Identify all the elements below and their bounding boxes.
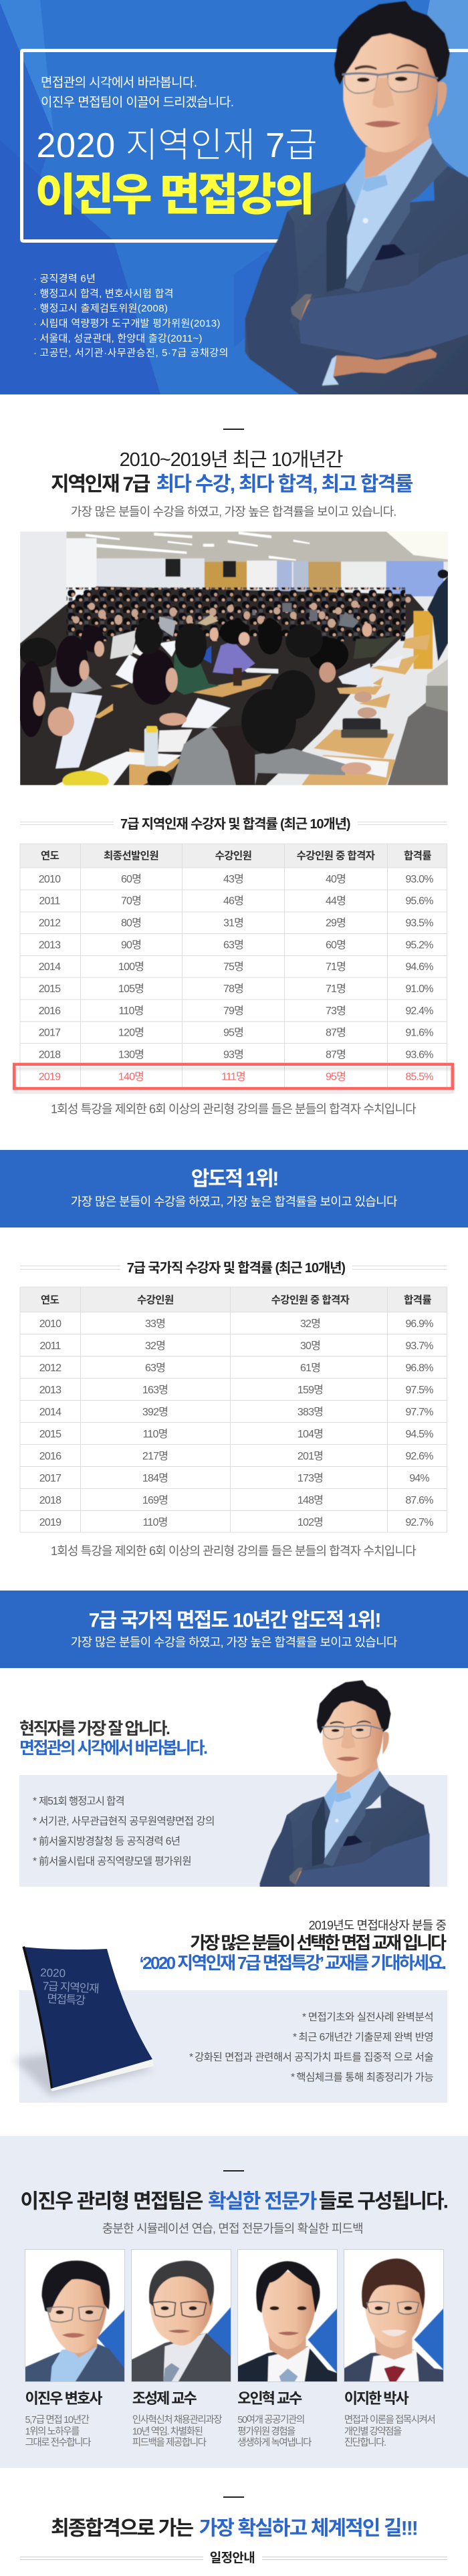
banner: overwhelming first place <box>0 1150 468 1227</box>
hero career list: · <box>33 333 37 344</box>
hero career list: 행정고시 출제검토위원(2008) <box>39 303 168 314</box>
table: national applicants and pass rate: 159명 <box>298 1384 323 1396</box>
card: 오인혁 교수: 평가위원 경험을 <box>237 2426 296 2437</box>
profile bullets: * <box>33 1816 37 1827</box>
heading: regional table: 7급 지역인재 수강자 및 합격률 (최근 10개년) <box>120 816 350 832</box>
table: national applicants and pass rate: 61명 <box>300 1362 320 1374</box>
table: regional talent applicants and pass rate: 수강인원 중 합격자 <box>297 850 375 862</box>
table: regional talent applicants and pass rate: 40명 <box>326 873 346 885</box>
hero career list: · <box>33 348 37 358</box>
table: regional talent applicants and pass rate: 44명 <box>326 895 346 907</box>
profile heading <box>19 1720 208 1758</box>
table: national applicants and pass rate: 104명 <box>298 1428 323 1440</box>
team heading: 확실한 전문가 <box>208 2190 317 2212</box>
table: regional talent applicants and pass rate: 60명 <box>326 939 346 951</box>
table: regional talent applicants and pass rate: 71명 <box>326 961 346 973</box>
textbook heading: 가장 많은 분들이 선택한 면접 교재 입니다 <box>190 1933 447 1953</box>
profile bullets <box>33 1795 215 1867</box>
table: regional talent applicants and pass rate: 93.5% <box>405 917 433 929</box>
table: national applicants and pass rate: 합격률 <box>404 1294 431 1306</box>
heading: final pass path: 최종합격으로 가는 <box>51 2518 194 2540</box>
table: national applicants and pass rate: 33명 <box>145 1318 165 1330</box>
table: national applicants and pass rate: 2015 <box>39 1429 62 1440</box>
table: regional talent applicants and pass rate: 92.4% <box>405 1006 433 1017</box>
table: national applicants and pass rate: 392명 <box>142 1406 168 1418</box>
card: 조성제 교수: 인사혁신처 채용관리과장 <box>132 2414 223 2426</box>
table: regional talent applicants and pass rate: 105명 <box>118 983 144 995</box>
table: regional talent applicants and pass rate: 46명 <box>223 895 243 907</box>
table: regional talent applicants and pass rate: 합격률 <box>404 850 431 862</box>
textbook bullets: * <box>291 2072 295 2083</box>
card: 조성제 교수: 피드백을 제공합니다 <box>132 2437 207 2448</box>
textbook bullets: 핵심체크를 통해 최종정리가 가능 <box>296 2071 434 2083</box>
card: 오인혁 교수: 50여개 공공기관의 <box>237 2414 305 2426</box>
table: regional talent applicants and pass rate: 2016 <box>39 1006 61 1017</box>
table: national applicants and pass rate: 94% <box>409 1473 429 1484</box>
table: regional talent applicants and pass rate: 최종선발인원 <box>104 850 158 862</box>
profile bullets: 제51회 행정고시 합격 <box>39 1795 125 1807</box>
table: national applicants and pass rate: 32명 <box>300 1318 320 1330</box>
profile background <box>19 1775 447 1887</box>
table: national applicants and pass rate: 63명 <box>145 1362 165 1374</box>
profile heading: 면접관의 시각에서 바라봅니다. <box>19 1739 208 1758</box>
table: national applicants and pass rate: 110명 <box>142 1428 168 1440</box>
profile bullets: 前서울지방경찰청 등 공직경력 6년 <box>39 1835 181 1847</box>
table: national applicants and pass rate <box>20 1287 447 1532</box>
heading: national table: 7급 국가직 수강자 및 합격률 (최근 10개년) <box>127 1260 346 1276</box>
table: national applicants and pass rate: 102명 <box>298 1516 323 1528</box>
profile heading: 현직자를 가장 잘 압니다. <box>19 1720 170 1738</box>
table: national applicants and pass rate: 173명 <box>298 1472 323 1484</box>
table: regional talent applicants and pass rate <box>20 844 447 1087</box>
textbook bullets: 최근 6개년간 기출문제 완벽 반영 <box>298 2031 434 2043</box>
banner: national first place: 가장 많은 분들이 수강을 하였고, 가장 높은 합격률을 보이고 있습니다 <box>71 1635 398 1649</box>
heading: final pass path: 가장 확실하고 체계적인 길!!! <box>199 2518 419 2540</box>
textbook heading: ‘2020 지역인재 7급 면접특강’ 교재를 기대하세요. <box>139 1953 447 1973</box>
profile portrait <box>259 1679 431 1887</box>
table: national applicants and pass rate: 30명 <box>300 1340 320 1352</box>
textbook background <box>19 1990 447 2103</box>
table: regional talent applicants and pass rate: 130명 <box>118 1048 144 1060</box>
hero career list: · <box>33 318 37 329</box>
team heading <box>20 2170 449 2236</box>
table: national applicants and pass rate: 184명 <box>142 1472 168 1484</box>
card: 이진우 변호사: 그대로 전수합니다 <box>25 2437 91 2448</box>
table: national applicants and pass rate: 연도 <box>41 1294 59 1306</box>
table: national applicants and pass rate: 2013 <box>39 1385 62 1396</box>
profile bullets: 서기관, 사무관급현직 공무원역량면접 강의 <box>39 1815 215 1827</box>
table: national applicants and pass rate: 2014 <box>39 1407 62 1418</box>
profile bullets: 前서울시립대 공직역량모델 평가위원 <box>39 1855 192 1867</box>
card: 이진우 변호사: 이진우 변호사 <box>25 2390 103 2407</box>
textbook heading <box>139 1919 447 1973</box>
table: regional talent applicants and pass rate: 수강인원 <box>215 850 252 862</box>
card: 이지한 박사: 면접과 이론을 접목시켜서 <box>344 2414 436 2426</box>
icon: textbook cover <box>13 1946 154 2096</box>
table: regional talent applicants and pass rate: 29명 <box>326 917 346 929</box>
card: 오인혁 교수: 생생하게 녹여냅니다 <box>237 2437 312 2448</box>
card: 이진우 변호사 <box>25 2249 124 2448</box>
textbook bullets <box>189 2011 434 2083</box>
card: 이진우 변호사: 5,7급 면접 10년간 <box>25 2414 90 2426</box>
heading: ten-year record: 2010~2019년 최근 10개년간 <box>120 449 344 471</box>
hero career list: 공직경력 6년 <box>39 273 96 285</box>
table: regional talent applicants and pass rate: 94.6% <box>405 961 433 973</box>
table: regional talent applicants and pass rate: 2014 <box>39 961 61 973</box>
card: 조성제 교수: 조성제 교수 <box>132 2390 197 2407</box>
panel: interview team <box>0 2136 468 2468</box>
photo: lecture hall <box>17 532 449 791</box>
table: regional talent applicants and pass rate: 85.5% <box>405 1071 433 1083</box>
card: 이지한 박사 <box>344 2249 444 2448</box>
hero career list: · <box>33 303 37 314</box>
table: national applicants and pass rate: 163명 <box>142 1384 168 1396</box>
heading: ten-year record: 최다 수강, 최다 합격, 최고 합격률 <box>156 473 413 495</box>
banner: overwhelming first place: 압도적 1위! <box>191 1168 279 1190</box>
table: regional talent applicants and pass rate: 75명 <box>223 961 243 973</box>
panel: instructor profile <box>19 1679 447 1887</box>
table: national applicants and pass rate: 201명 <box>298 1450 323 1462</box>
panel: textbook <box>13 1919 447 2103</box>
table: regional talent applicants and pass rate: 70명 <box>121 895 141 907</box>
table: national applicants and pass rate: 2012 <box>39 1363 62 1374</box>
table: regional talent applicants and pass rate: 95명 <box>326 1071 346 1083</box>
heading: ten-year record: 가장 많은 분들이 수강을 하였고, 가장 높은 합격률을 보이고 있습니다. <box>71 505 396 519</box>
textbook bullets: 면접기초와 실전사례 완벽분석 <box>308 2011 434 2023</box>
table: regional talent applicants and pass rate: 93명 <box>223 1048 243 1060</box>
heading: ten-year record <box>51 429 413 519</box>
table: regional talent applicants and pass rate: 80명 <box>121 917 141 929</box>
table: regional talent applicants and pass rate: 78명 <box>223 983 243 995</box>
table: national applicants and pass rate: 수강인원 중 합격자 <box>271 1294 350 1306</box>
table: regional talent applicants and pass rate: 2011 <box>39 896 60 907</box>
icon: textbook cover: 면접특강 <box>47 1992 86 2007</box>
banner: national first place: 7급 국가직 면접도 10년간 압도적 1위! <box>89 1610 381 1631</box>
hero career list <box>33 273 228 358</box>
table: regional talent applicants and pass rate: 87명 <box>326 1048 346 1060</box>
table: national applicants and pass rate: 92.6% <box>405 1451 433 1462</box>
table: national applicants and pass rate: 148명 <box>298 1494 323 1506</box>
table: national applicants and pass rate: 97.5% <box>405 1385 433 1396</box>
table: national applicants and pass rate: 92.7% <box>405 1517 433 1528</box>
table: regional talent applicants and pass rate: 2013 <box>39 940 61 951</box>
table: regional talent applicants and pass rate: 95.6% <box>405 896 433 907</box>
profile bullets: * <box>33 1836 37 1847</box>
table: national applicants and pass rate: 2011 <box>39 1340 61 1352</box>
heading: final pass path <box>51 2496 419 2540</box>
table: national applicants and pass rate: 383명 <box>298 1406 323 1418</box>
heading: ten-year record: 지역인재 7급 <box>51 473 150 495</box>
textbook bullets: * <box>189 2052 193 2063</box>
table: regional talent applicants and pass rate: 120명 <box>118 1027 144 1039</box>
table: national applicants and pass rate: 94.5% <box>405 1429 433 1440</box>
hero career list: 행정고시 합격, 변호사시험 합격 <box>39 288 173 300</box>
table: national applicants and pass rate: 2018 <box>39 1495 62 1506</box>
table: regional talent applicants and pass rate: 79명 <box>223 1005 243 1017</box>
table: regional talent applicants and pass rate: 91.6% <box>405 1027 433 1039</box>
table: national applicants and pass rate: 32명 <box>145 1340 165 1352</box>
table: regional talent applicants and pass rate: 110명 <box>118 1005 144 1017</box>
table: national applicants and pass rate: 2017 <box>39 1473 62 1484</box>
table: regional talent applicants and pass rate: 2018 <box>39 1050 61 1060</box>
team background <box>0 2136 468 2468</box>
table: national applicants and pass rate: 87.6% <box>405 1495 433 1506</box>
table: regional talent applicants and pass rate: 60명 <box>121 873 141 885</box>
table: national applicants and pass rate: 217명 <box>142 1450 168 1462</box>
table: regional talent applicants and pass rate: 연도 <box>41 850 59 862</box>
table: national applicants and pass rate: 96.9% <box>405 1318 433 1330</box>
table: regional talent applicants and pass rate: 93.0% <box>405 874 433 885</box>
table: regional talent applicants and pass rate: 140명 <box>118 1071 144 1083</box>
hero career list: 서울대, 성균관대, 한양대 출강(2011~) <box>39 333 202 344</box>
table: regional talent applicants and pass rate: 73명 <box>326 1005 346 1017</box>
hero intro text: 면접관의 시각에서 바라봅니다. <box>41 75 197 90</box>
highlight box: 2019 row <box>14 1064 453 1092</box>
heading: schedule: 일정안내 <box>210 2551 255 2565</box>
team heading: 들로 구성됩니다. <box>319 2190 449 2212</box>
table: regional talent applicants and pass rate: 2015 <box>39 983 61 995</box>
card: 오인혁 교수 <box>237 2249 337 2448</box>
hero title <box>35 126 317 219</box>
table: regional talent applicants and pass rate: 91.0% <box>405 983 433 995</box>
table: national applicants and pass rate: 2016 <box>39 1451 62 1462</box>
textbook heading: 2019년도 면접대상자 분들 중 <box>309 1919 447 1932</box>
table: regional talent applicants and pass rate: 63명 <box>223 939 243 951</box>
hero intro text <box>41 75 234 110</box>
icon: textbook cover: 7급 지역인재 <box>42 1980 100 1995</box>
profile bullets: * <box>33 1856 37 1867</box>
table: national applicants and pass rate: 2019 <box>39 1517 62 1528</box>
table: regional talent applicants and pass rate: 90명 <box>121 939 141 951</box>
table: national applicants and pass rate: 169명 <box>142 1494 168 1506</box>
hero career list: 시립대 역량평가 도구개발 평가위원(2013) <box>39 318 220 329</box>
table: regional talent applicants and pass rate: 100명 <box>118 961 144 973</box>
team heading: 이진우 관리형 면접팀은 <box>20 2190 203 2212</box>
table: national applicants and pass rate: 96.8% <box>405 1363 433 1374</box>
table: regional talent applicants and pass rate: 31명 <box>223 917 243 929</box>
hero title: 2020 지역인재 7급 <box>36 126 317 165</box>
table: national applicants and pass rate: 2010 <box>39 1318 62 1330</box>
card: 오인혁 교수: 오인혁 교수 <box>237 2390 302 2407</box>
banner: overwhelming first place: 가장 많은 분들이 수강을 하였고, 가장 높은 합격률을 보이고 있습니다 <box>71 1195 398 1208</box>
note: regional table: 1회성 특강을 제외한 6회 이상의 관리형 강의를 들은 분들의 합격자 수치입니다 <box>51 1102 417 1116</box>
table: regional talent applicants and pass rate: 2017 <box>39 1027 61 1039</box>
hero intro text: 이진우 면접팀이 이끌어 드리겠습니다. <box>41 95 234 110</box>
icon: textbook cover: 2020 <box>40 1966 66 1980</box>
table: regional talent applicants and pass rate: 111명 <box>221 1071 245 1083</box>
textbook bullets: * <box>293 2032 297 2043</box>
hero career list: · <box>33 273 37 285</box>
table: national applicants and pass rate: 수강인원 <box>137 1294 174 1306</box>
profile bullets: * <box>33 1796 37 1807</box>
table: regional talent applicants and pass rate: 2012 <box>39 917 61 929</box>
card: 이지한 박사: 진단합니다. <box>344 2437 386 2448</box>
card: 조성제 교수: 10년 역임. 차별화된 <box>132 2426 203 2437</box>
hero career list: 고공단, 서기관·사무관승진, 5·7급 공채강의 <box>39 348 228 358</box>
table: regional talent applicants and pass rate: 95명 <box>223 1027 243 1039</box>
table: regional talent applicants and pass rate: 71명 <box>326 983 346 995</box>
banner: national first place <box>0 1591 468 1668</box>
hero title: 이진우 면접강의 <box>35 170 315 219</box>
table: regional talent applicants and pass rate: 43명 <box>223 873 243 885</box>
table: regional talent applicants and pass rate: 2010 <box>39 874 61 885</box>
note: national table: 1회성 특강을 제외한 6회 이상의 관리형 강의를 들은 분들의 합격자 수치입니다 <box>51 1544 417 1558</box>
card: 이진우 변호사: 1위의 노하우를 <box>25 2426 80 2437</box>
table: national applicants and pass rate: 93.7% <box>405 1340 433 1352</box>
hero background facets <box>0 0 468 394</box>
card: 이지한 박사: 개인별 강약점을 <box>344 2426 402 2437</box>
team heading: 충분한 시뮬레이션 연습, 면접 전문가들의 확실한 피드백 <box>102 2222 364 2236</box>
textbook bullets: * <box>302 2012 306 2023</box>
table: national applicants and pass rate: 110명 <box>142 1516 168 1528</box>
card: 이지한 박사: 이지한 박사 <box>344 2390 409 2407</box>
table: national applicants and pass rate: 97.7% <box>405 1407 433 1418</box>
hero frame <box>21 51 468 241</box>
hero portrait <box>245 1 468 394</box>
hero career list: · <box>33 288 37 300</box>
panel: hero banner <box>0 0 468 394</box>
textbook bullets: 강화된 면접과 관련해서 공직가치 파트를 집중적 으로 서술 <box>195 2051 434 2063</box>
card: 조성제 교수 <box>131 2249 231 2448</box>
table: regional talent applicants and pass rate: 87명 <box>326 1027 346 1039</box>
table: regional talent applicants and pass rate: 2019 <box>39 1071 61 1083</box>
table: regional talent applicants and pass rate: 95.2% <box>405 940 433 951</box>
table: regional talent applicants and pass rate: 93.6% <box>405 1050 433 1060</box>
